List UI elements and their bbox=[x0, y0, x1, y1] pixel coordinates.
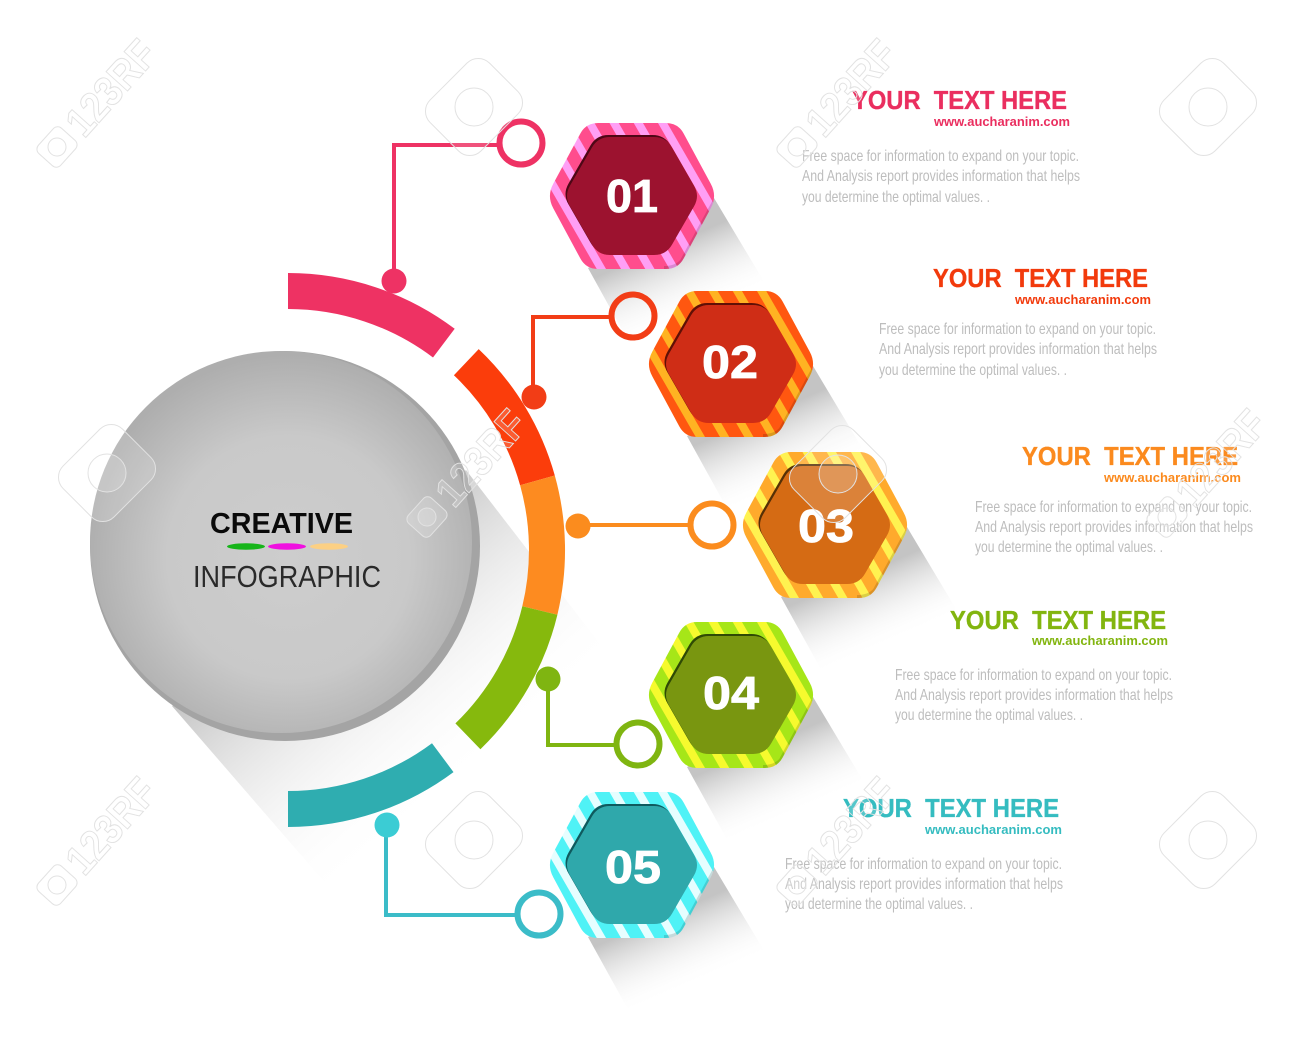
text block 1 bbox=[802, 85, 1080, 206]
watermark icon bbox=[783, 419, 893, 529]
watermark stamp: 123RF bbox=[796, 31, 906, 145]
watermark stamp: 123RF bbox=[1166, 401, 1276, 515]
text block 1: And Analysis report provides information that helps bbox=[802, 168, 1080, 185]
hexagon 05: 05 bbox=[605, 841, 661, 893]
hexagon 02: 02 bbox=[702, 336, 758, 388]
watermark stamp bbox=[29, 769, 166, 914]
watermark stamp bbox=[1139, 401, 1276, 546]
hexagon 03 bbox=[743, 452, 907, 598]
text block 4 bbox=[895, 605, 1173, 724]
connector 4 bbox=[536, 666, 660, 766]
text block 2: www.aucharanim.com bbox=[1014, 292, 1151, 307]
hexagon 01 bbox=[550, 123, 714, 269]
hexagon long shadow 2 bbox=[687, 366, 865, 512]
watermark stamp: 123RF bbox=[56, 31, 166, 145]
text block 4: And Analysis report provides information that helps bbox=[895, 687, 1173, 704]
hexagon 04: 04 bbox=[703, 667, 759, 719]
text block 1: www.aucharanim.com bbox=[933, 114, 1070, 129]
hexagon long shadow 3 bbox=[781, 527, 959, 673]
watermark stamp bbox=[769, 769, 906, 914]
ring segment 4 bbox=[455, 606, 557, 749]
text block 1: YOUR TEXT HERE bbox=[852, 85, 1067, 115]
hexagon 05 bbox=[550, 792, 714, 938]
text block 4: YOUR TEXT HERE bbox=[950, 605, 1166, 635]
hexagon 04 bbox=[649, 622, 813, 768]
ring segment 5 bbox=[288, 743, 454, 827]
connector 3 bbox=[566, 504, 734, 546]
watermark stamp bbox=[29, 31, 166, 176]
watermark icon bbox=[419, 52, 529, 162]
ring segment 2 bbox=[454, 349, 555, 485]
watermark icon bbox=[52, 418, 162, 528]
hexagon long shadow 4 bbox=[687, 697, 865, 843]
watermark stamp bbox=[399, 401, 536, 546]
circle title: INFOGRAPHIC bbox=[193, 559, 381, 594]
text block 4: Free space for information to expand on your topic. bbox=[895, 667, 1172, 684]
watermark stamp bbox=[769, 31, 906, 176]
watermark icon bbox=[419, 785, 529, 895]
circle title bbox=[193, 508, 381, 594]
circle title: CREATIVE bbox=[210, 508, 353, 540]
central grey circle bbox=[90, 351, 480, 741]
ring segment 1 bbox=[288, 273, 455, 358]
hexagon 03: 03 bbox=[798, 500, 854, 552]
text block 2: you determine the optimal values. . bbox=[879, 362, 1067, 379]
text block 3 bbox=[975, 441, 1253, 556]
ring segment 3 bbox=[520, 476, 565, 615]
circle long shadow bbox=[172, 470, 620, 900]
watermark icon bbox=[1153, 52, 1263, 162]
watermark icon bbox=[1153, 785, 1263, 895]
colour accent marks bbox=[227, 543, 348, 550]
hexagon 01: 01 bbox=[606, 170, 658, 222]
text block 5: you determine the optimal values. . bbox=[785, 896, 973, 913]
watermark stamp: 123RF bbox=[56, 769, 166, 883]
text block 4: www.aucharanim.com bbox=[1031, 633, 1168, 648]
text block 5: YOUR TEXT HERE bbox=[843, 793, 1059, 823]
text block 3: YOUR TEXT HERE bbox=[1022, 441, 1238, 471]
text block 2: YOUR TEXT HERE bbox=[933, 263, 1148, 293]
text block 5: Free space for information to expand on your topic. bbox=[785, 856, 1062, 873]
connector 1 bbox=[382, 122, 542, 294]
text block 5: And Analysis report provides information that helps bbox=[785, 876, 1063, 893]
text block 1: Free space for information to expand on your topic. bbox=[802, 148, 1079, 165]
text block 5 bbox=[785, 793, 1063, 913]
text block 3: you determine the optimal values. . bbox=[975, 539, 1163, 556]
text block 2: Free space for information to expand on your topic. bbox=[879, 321, 1156, 338]
watermark stamp: 123RF bbox=[796, 769, 906, 883]
hexagon long shadow 5 bbox=[588, 867, 766, 1013]
text block 3: www.aucharanim.com bbox=[1103, 470, 1241, 485]
hexagon 02 bbox=[649, 291, 813, 437]
text block 1: you determine the optimal values. . bbox=[802, 189, 990, 206]
text block 5: www.aucharanim.com bbox=[924, 822, 1062, 837]
hexagon long shadow 1 bbox=[588, 198, 766, 344]
text block 4: you determine the optimal values. . bbox=[895, 707, 1083, 724]
text block 2 bbox=[879, 263, 1157, 379]
connector 2 bbox=[522, 294, 654, 410]
watermark stamp: 123RF bbox=[426, 401, 536, 515]
connector 5 bbox=[374, 812, 560, 936]
text block 2: And Analysis report provides information that helps bbox=[879, 341, 1157, 358]
